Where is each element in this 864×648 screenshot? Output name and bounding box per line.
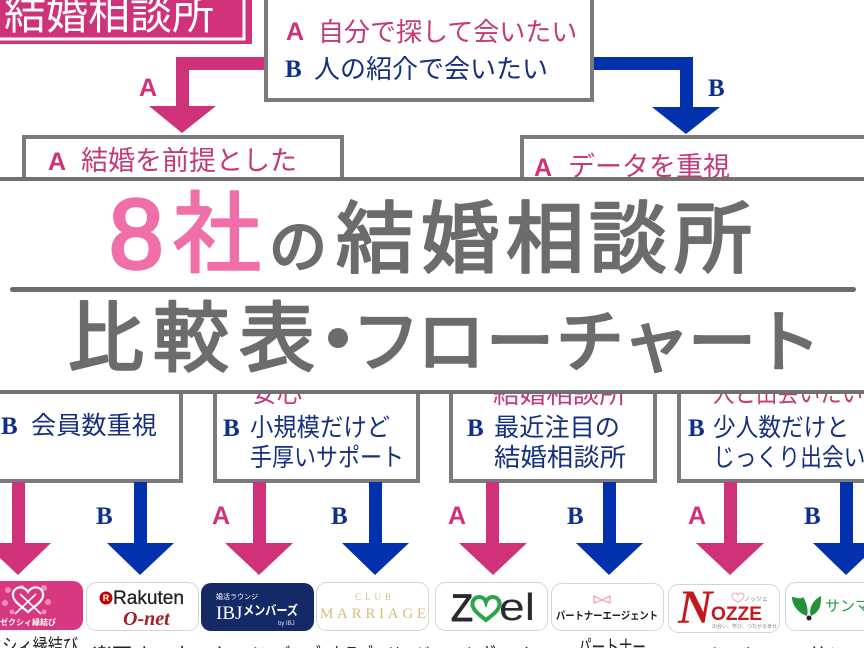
question box: top [266, 0, 592, 100]
question box: left branch: 結婚を前提とした [81, 146, 297, 176]
labels: A and B on bottom arrows: A [212, 502, 230, 530]
question box: 小規模: 小規模だけど [250, 414, 390, 442]
labels: A and B on bottom arrows: B [331, 503, 348, 530]
logo: Sanmarie [786, 582, 864, 630]
logo: IBJ members: 婚活ラウンジ [216, 592, 258, 601]
title: 8社の結婚相談所 [109, 179, 752, 289]
title: 8社の結婚相談所: 社 [173, 185, 261, 284]
subtitle: 比較表・フローチャート: 比較表 [68, 297, 315, 382]
title banner [0, 179, 864, 392]
labels: A and B on bottom arrows: B [804, 503, 821, 530]
question box: 少人数: B [688, 415, 705, 442]
question box: right branch [522, 137, 864, 197]
question box: 小規模: 安心 [252, 380, 302, 408]
question box: top: 人の紹介で会いたい [314, 54, 548, 84]
logo: IBJ members [201, 583, 314, 631]
labels: A and B on bottom arrows: B [567, 503, 584, 530]
logo: Rakuten O-net [86, 582, 198, 630]
question box: 小規模: B [223, 415, 240, 442]
question box: 最近注目: 結婚相談所 [494, 444, 626, 472]
logo: IBJ members: メンバーズ [243, 603, 298, 618]
question box: right branch: データを重視 [568, 152, 730, 182]
logo: Nozze: 出会い、学び、つながる幸せ [712, 623, 777, 630]
title: 8社の結婚相談所: 結婚相談所 [336, 195, 752, 283]
logo: Partner Agent: パートナーエージェント [556, 610, 658, 622]
logo: Zwei [436, 582, 548, 630]
captions: company names [0, 635, 864, 648]
logo: Rakuten O-net: Rakuten [113, 588, 184, 609]
logo: Zwei: Z [451, 588, 473, 630]
logo: Nozze: OZZE [711, 604, 762, 625]
subtitle: 比較表・フローチャート: フローチャート [352, 305, 821, 381]
logo: Nozze [668, 581, 780, 634]
labels: A and B on bottom arrows: A [448, 502, 466, 530]
logo: Rakuten O-net: R [103, 593, 110, 603]
question box: 会員数重視 [0, 370, 181, 481]
divider [10, 287, 856, 292]
label: A: A [139, 74, 157, 102]
question box: 会員数重視: B [1, 413, 18, 440]
logo: Partner Agent [552, 584, 664, 630]
labels: A and B on bottom arrows: B [96, 503, 113, 530]
logo: pink heart: ゼクシィ縁結び [0, 617, 56, 627]
arrows: bottom row to companies [0, 482, 864, 575]
question box: top: 自分で探して会いたい [318, 17, 577, 47]
question box: top: A [286, 18, 304, 46]
question box: 小規模 [215, 370, 418, 481]
logo: Nozze: ノッツェ [744, 597, 768, 603]
question box: 最近注目 [451, 370, 655, 481]
question box: 小規模: 手厚いサポート [250, 444, 404, 472]
title: 8社の結婚相談所: の [269, 215, 327, 280]
arrow: A to left branch [149, 57, 266, 133]
question box: left branch [24, 137, 342, 197]
question box: 会員数重視: 会員数重視 [31, 412, 157, 440]
logo: Zwei: el [499, 587, 535, 629]
logo: Club Marriage: CLUB [355, 592, 391, 602]
arrow: B to right branch [592, 57, 720, 134]
logo: IBJ members: by IBJ [278, 621, 295, 627]
logo: IBJ members: IBJ [216, 603, 242, 624]
question box: 最近注目: 最近注目の [494, 414, 620, 442]
labels: A and B on bottom arrows [96, 502, 821, 530]
question box: right branch: A [534, 154, 552, 182]
question box: 少人数 [679, 370, 864, 481]
subtitle: 比較表・フローチャート [68, 297, 821, 382]
logo: Nozze: N [677, 581, 715, 634]
labels: A and B on bottom arrows: A [688, 502, 706, 530]
question box: 最近注目: B [467, 415, 484, 442]
question box: 少人数: 少人数だけと [713, 414, 849, 442]
logo: Club Marriage [316, 582, 428, 630]
label: B: B [708, 75, 725, 102]
question box: left branch: A [48, 148, 66, 176]
logo: Club Marriage: MARRIAGE [320, 606, 426, 622]
title: 8社の結婚相談所: 8 [109, 179, 164, 289]
question box: top: B [285, 56, 302, 83]
logo: pink heart [0, 581, 83, 630]
logo: Rakuten O-net: O-net [123, 608, 171, 630]
question box: 最近注目: 結婚相談所 [493, 381, 626, 409]
